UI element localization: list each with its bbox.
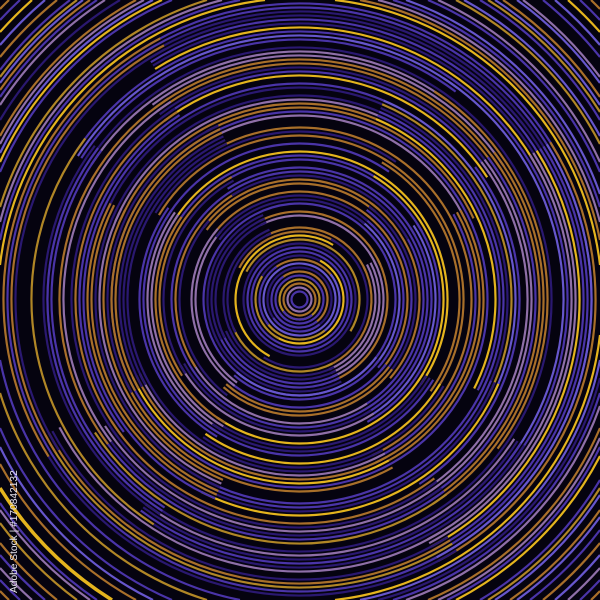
watermark text: Adobe Stock | #170842132 (9, 470, 20, 593)
